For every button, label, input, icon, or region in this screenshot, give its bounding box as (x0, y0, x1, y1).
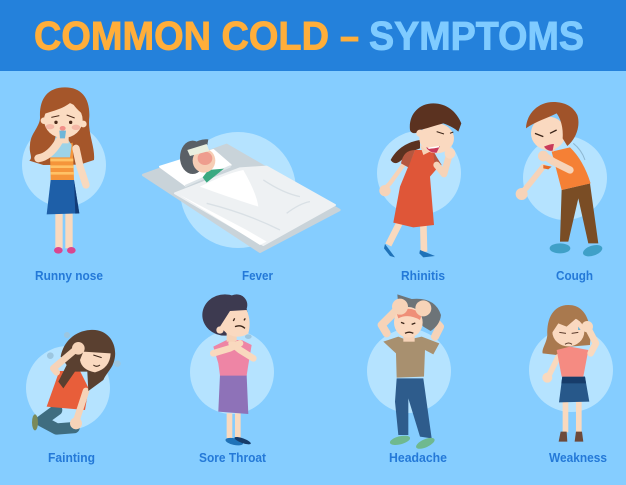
illustration: kneeling girl (32, 330, 121, 430)
title: COMMON COLD (34, 14, 329, 58)
header banner (0, 0, 626, 71)
illustration: girl with runny nose (29, 87, 94, 254)
label: Sore Throat (199, 451, 267, 465)
label: Cough (556, 269, 593, 283)
panel: weakness (529, 305, 613, 465)
title: SYMPTOMS (369, 14, 584, 58)
panel: cough (516, 102, 607, 283)
panel: runny nose (22, 87, 106, 283)
panel: headache (367, 294, 451, 465)
title (34, 14, 584, 58)
panel: fainting (26, 330, 121, 465)
label: Fever (242, 269, 273, 283)
panel: sore throat (190, 294, 274, 465)
panel: fever (143, 132, 339, 283)
label: Weakness (549, 451, 607, 465)
illustration: girl sneezing (379, 103, 461, 257)
label: Rhinitis (401, 269, 445, 283)
illustration: person in bed (143, 139, 339, 252)
illustration: man holding head (382, 294, 441, 451)
label: Runny nose (35, 269, 103, 283)
label: Headache (389, 451, 447, 465)
illustration: tired girl (542, 305, 596, 442)
panel: rhinitis (377, 103, 461, 283)
label: Fainting (48, 451, 95, 465)
illustration: woman holding throat (202, 294, 253, 447)
illustration: boy coughing (516, 102, 604, 258)
title: – (340, 14, 359, 58)
